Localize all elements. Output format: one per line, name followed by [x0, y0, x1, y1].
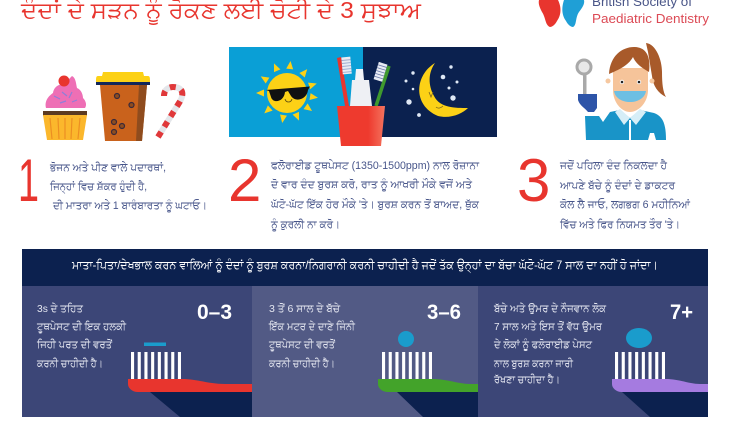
text: tip 3	[559, 159, 691, 231]
banner: ਮਾਤਾ-ਪਿਤਾ/ਦੇਖਭਾਲ ਕਰਨ ਵਾਲਿਆਂ ਨੂੰ ਦੰਦਾਂ ਨੂੰ ਬੁਰਸ਼ ਕਰਨਾ/ਨਿਗਰਾਨੀ ਕਰਨੀ ਚਾਹੀਦੀ ਹੈ ਜਦੋਂ ਤੱਕ ਉਨ੍ਹਾਂ ਦਾ ਬੱਚਾ ਘੱਟੋ-ਘੱਟ 7 ਸਾਲ ਦਾ ਨਹੀਂ ਹੋ ਜਾਂਦਾ।	[71, 258, 658, 273]
text: age 0-3 advice: ਟੂਥਪੇਸਟ ਦੀ ਇਕ ਹਲਕੀ	[36, 320, 127, 333]
text: tip 1: ਜਿਨ੍ਹਾਂ ਵਿਚ ਸ਼ੱਕਰ ਹੁੰਦੀ ਹੈ,	[49, 180, 147, 193]
stars	[404, 65, 458, 117]
text: tip 2: ਘੱਟੋ-ਘੱਟ ਇੱਕ ਹੋਰ ਮੌਕੇ 'ਤੇ। ਬੁਰਸ਼ ਕਰਨ ਤੋਂ ਬਾਅਦ, ਥੁੱਕ	[270, 198, 479, 211]
text: age 7+ advice: ਰੱਖਣਾ ਚਾਹੀਦਾ ਹੈ।	[493, 373, 560, 386]
text: age 7+ advice: ਨਾਲ ਬੁਰਸ਼ ਕਰਨਾ ਜਾਰੀ	[493, 357, 574, 370]
text: age 0-3 advice: ਕਰਨੀ ਚਾਹੀਦੀ ਹੈ।	[36, 357, 103, 370]
icon: green toothbrush with pea of paste	[378, 331, 478, 417]
text: tip 3: ਕੋਲ ਲੈ ਜਾਓ, ਲਗਭਗ 6 ਮਹੀਨਿਆਂ	[559, 198, 691, 211]
panel: age 7+	[478, 286, 708, 417]
text: tip 2: ਨੂੰ ਕੁਰਲੀ ਨਾ ਕਰੋ।	[270, 218, 340, 231]
age label 7+: 7+	[670, 301, 693, 324]
text: tip 3: ਵਿੱਚ ਅਤੇ ਫਿਰ ਨਿਯਮਤ ਤੌਰ 'ਤੇ।	[559, 218, 680, 231]
icon: purple toothbrush with large blob of paste	[612, 328, 708, 417]
icon: toothbrushes and toothpaste in cup	[337, 57, 389, 146]
icon: sun with sunglasses	[256, 61, 318, 123]
text: age 0-3 advice: 3s ਦੇ ਤਹਿਤ	[37, 302, 84, 315]
text: tip 2: ਦੋ ਵਾਰ ਦੰਦ ਬੁਰਸ਼ ਕਰੋ, ਰਾਤ ਨੂੰ ਆਖਰੀ ਮੌਕੇ ਵਜੋਂ ਅਤੇ	[270, 178, 473, 191]
text: age 7+ advice: ਦੇ ਲੋਕਾਂ ਨੂੰ ਫਲੋਰਾਈਡ ਪੇਸਟ	[493, 338, 593, 351]
logo text	[592, 0, 710, 26]
icon: cupcake	[43, 76, 87, 140]
text: age 7+ advice: ਬੱਚੇ ਅਤੇ ਉਮਰ ਦੇ ਨੌਜਵਾਨ ਲੋਕ	[493, 302, 607, 315]
age label 3-6: 3–6	[427, 301, 461, 324]
text: tip 1	[49, 161, 207, 212]
logo text: Paediatric Dentistry	[592, 11, 710, 26]
text: age 3-6 advice: ਕਰਨੀ ਚਾਹੀਦੀ ਹੈ।	[268, 357, 335, 370]
icon: red and blue profile faces	[539, 0, 584, 27]
icon: red toothbrush with smear of paste	[128, 342, 252, 417]
text: tip 3: ਆਪਣੇ ਬੱਚੇ ਨੂੰ ਦੰਦਾਂ ਦੇ ਡਾਕਟਰ	[559, 179, 675, 192]
age label 0-3: 0–3	[197, 301, 232, 324]
icon: dental mirror	[577, 60, 597, 112]
text: age 7+ advice	[493, 302, 607, 386]
number 1: 1	[18, 147, 39, 214]
text: age 3-6 advice: 3 ਤੋਂ 6 ਸਾਲ ਦੇ ਬੱਚੇ	[269, 302, 341, 315]
text: tip 1: ਭੋਜਨ ਅਤੇ ਪੀਣ ਵਾਲੇ ਪਦਾਰਥਾਂ,	[49, 161, 166, 174]
number 3: 3	[517, 147, 550, 214]
icon: crescent moon	[419, 63, 468, 117]
panel: age 0-3	[22, 286, 252, 417]
panel: age 3-6	[252, 286, 478, 417]
icon: candy cane	[158, 87, 182, 137]
panel: day and night illustration	[229, 47, 497, 137]
text: age 0-3 advice	[36, 302, 127, 370]
text: tip 2: ਫਲੋਰਾਈਡ ਟੂਥਪੇਸਟ (1350-1500ppm) ਨਾਲ ਰੋਜ਼ਾਨਾ	[270, 159, 480, 172]
text: tip 3: ਜਦੋਂ ਪਹਿਲਾ ਦੰਦ ਨਿਕਲਦਾ ਹੈ	[559, 159, 667, 172]
logo: British Society of Paediatric Dentistry	[539, 0, 710, 27]
text: age 3-6 advice: ਇੱਕ ਮਟਰ ਦੇ ਦਾਣੇ ਜਿੰਨੀ	[268, 320, 356, 333]
icon: takeaway cup	[96, 72, 150, 141]
text: age 3-6 advice	[268, 302, 356, 370]
text: age 7+ advice: 7 ਸਾਲ ਅਤੇ ਇਸ ਤੋਂ ਵੱਧ ਉਮਰ	[494, 320, 602, 333]
text: tip 1: ਦੀ ਮਾਤਰਾ ਅਤੇ 1 ਬਾਰੰਬਾਰਤਾ ਨੂੰ ਘਟਾਓ।	[52, 199, 207, 212]
number 2: 2	[228, 147, 261, 214]
banner	[22, 249, 708, 286]
icon: dentist	[577, 43, 666, 140]
text: age 3-6 advice: ਟੂਥਪੇਸਟ ਦੀ ਵਰਤੋਂ	[268, 338, 336, 351]
text: age 0-3 advice: ਜਿਹੀ ਪਰਤ ਦੀ ਵਰਤੋਂ	[36, 338, 113, 351]
text: tip 2	[270, 159, 480, 231]
